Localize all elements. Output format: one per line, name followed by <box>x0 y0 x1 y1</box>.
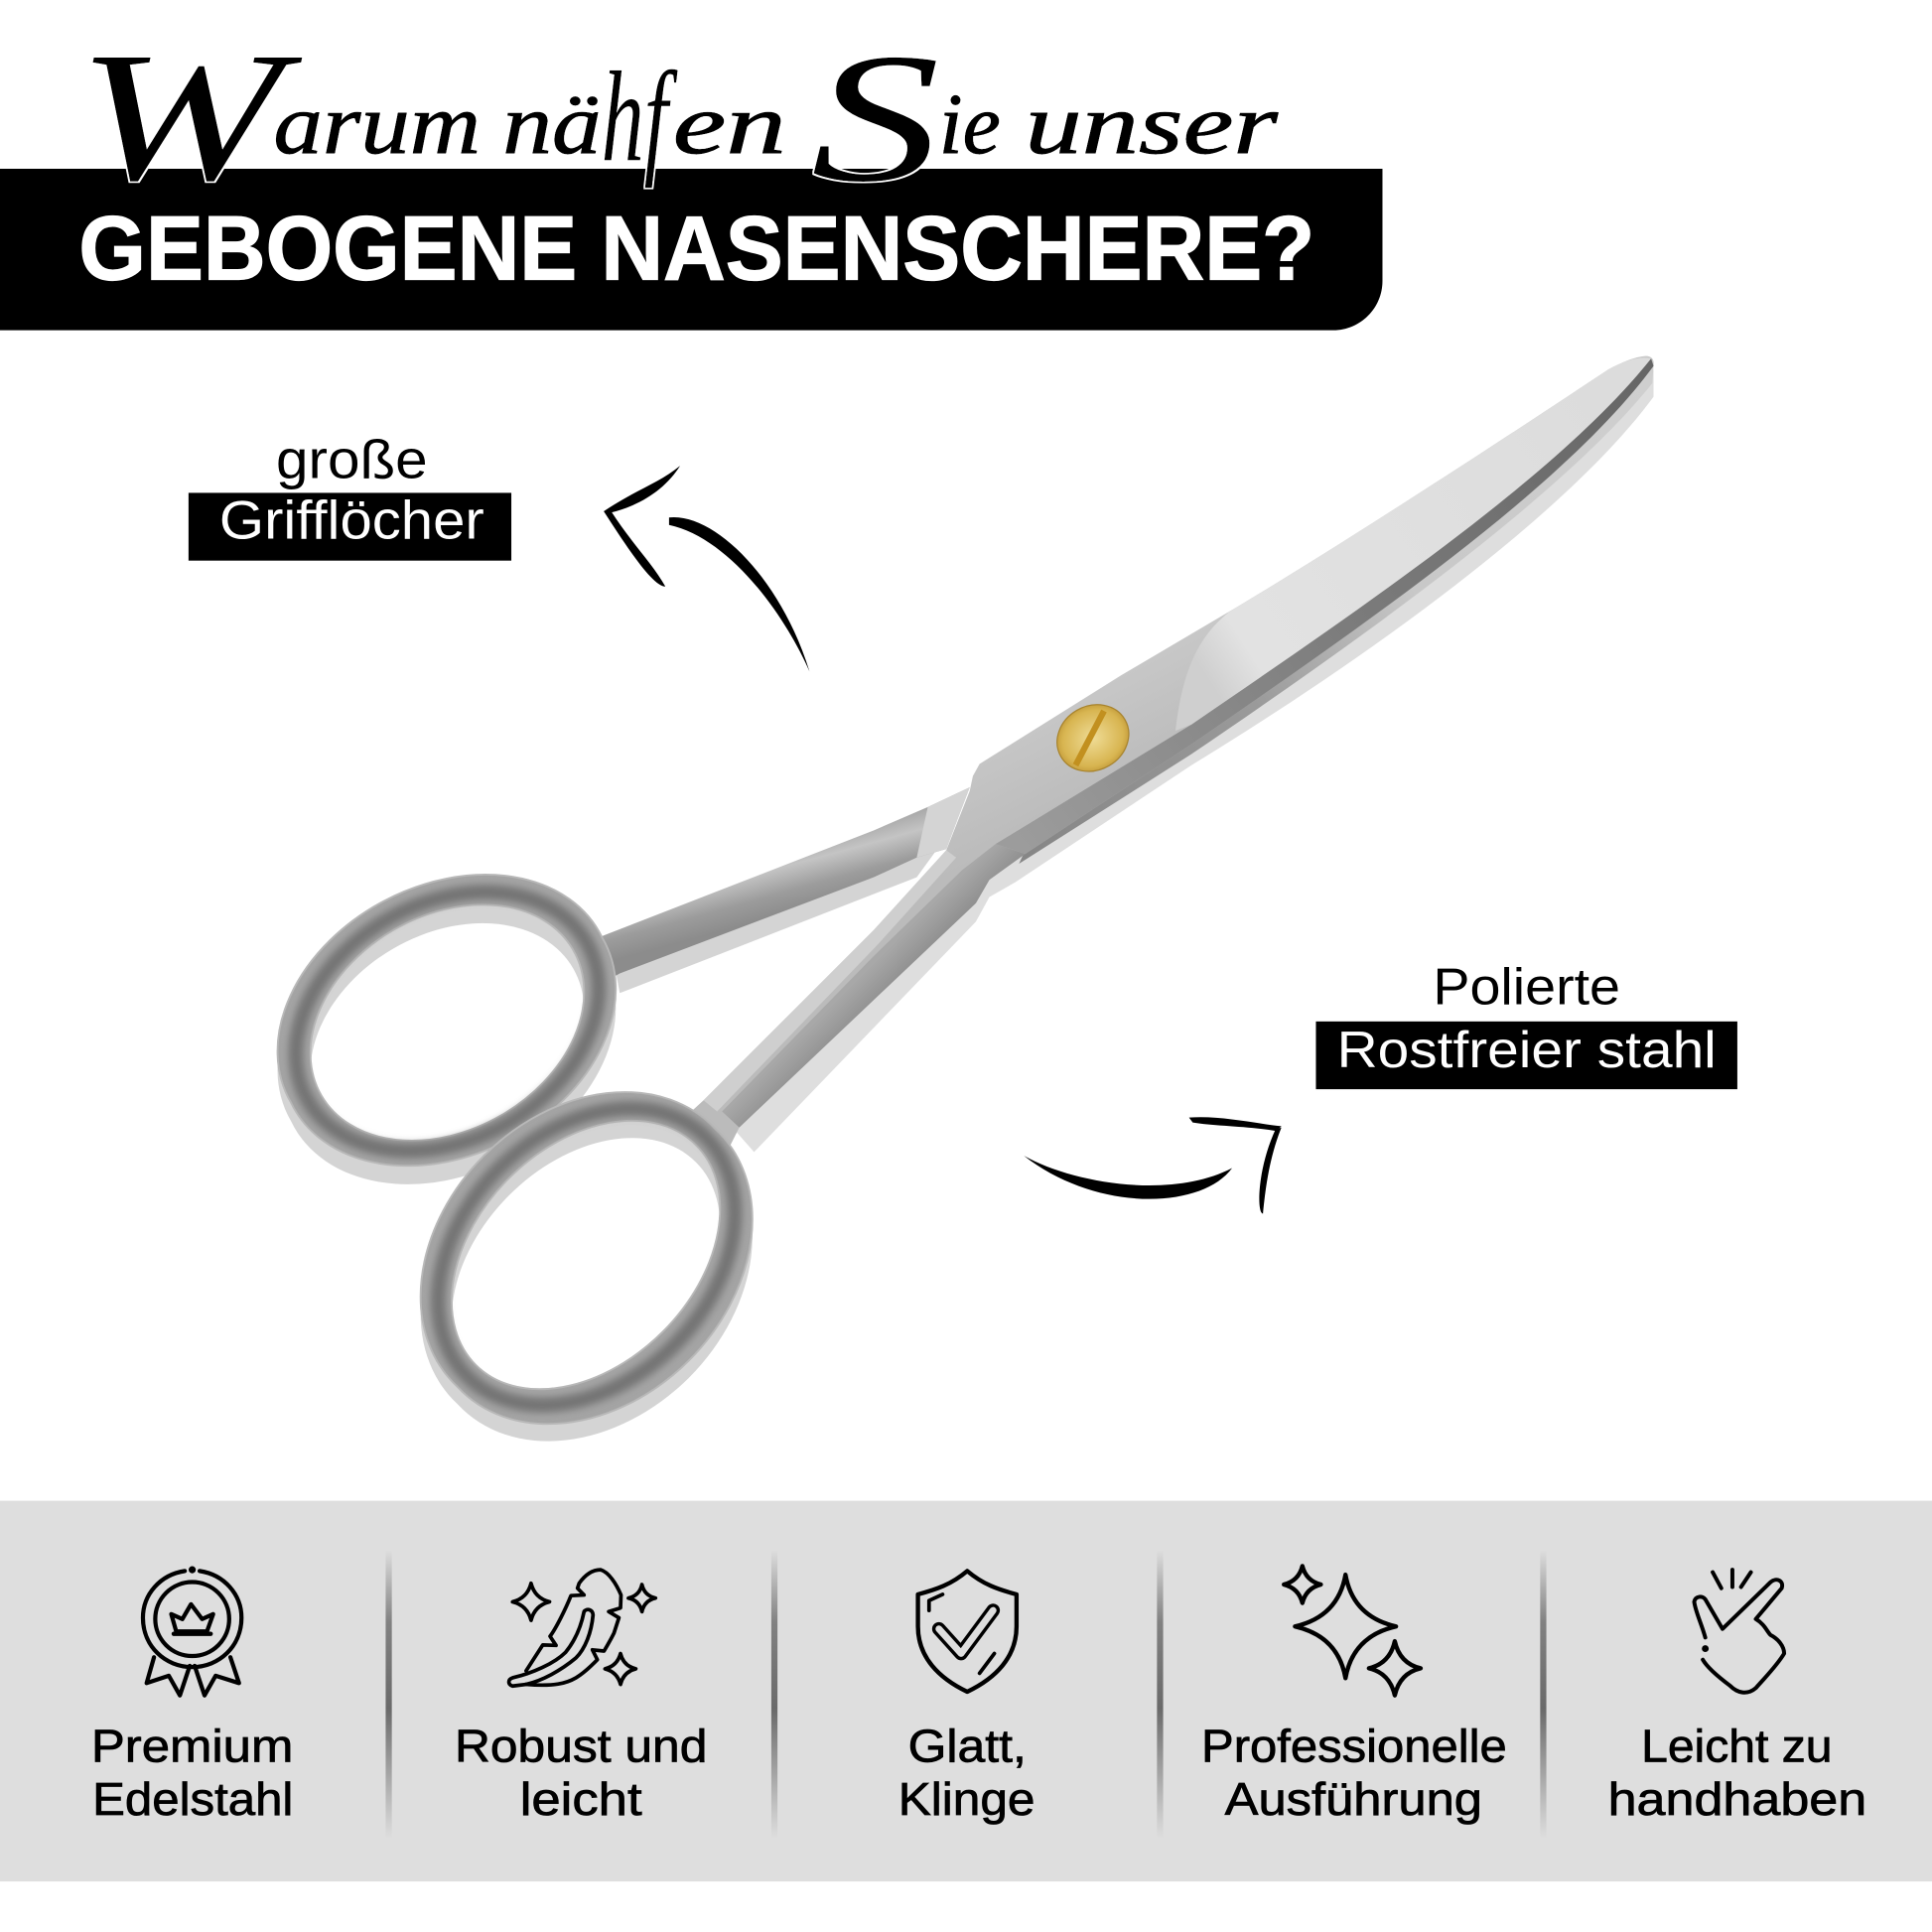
label: Glatt, <box>908 1721 1027 1772</box>
finger ring upper <box>250 840 644 1202</box>
callout line one: Polierte <box>1433 958 1620 1016</box>
callout: Polierte Rostfreier stahl <box>1315 958 1737 1089</box>
callout line two: Grifflöcher <box>219 489 484 550</box>
upper shank <box>589 787 970 986</box>
arrow: to blade <box>1024 1117 1282 1213</box>
callout line one: große <box>276 430 428 490</box>
finger ring lower <box>379 1049 794 1464</box>
label: Premium <box>91 1721 293 1772</box>
icon: snapping hand <box>1694 1570 1784 1693</box>
banner background <box>0 169 1382 331</box>
script heading: en <box>673 76 786 172</box>
label: Professionelle <box>1201 1721 1507 1772</box>
icon: sparkles <box>1284 1566 1421 1696</box>
arrow: to handle holes <box>604 466 809 671</box>
label: handhaben <box>1608 1773 1866 1825</box>
script heading: nä <box>502 76 602 172</box>
blade bevel <box>996 358 1654 854</box>
script heading: unser <box>1026 76 1280 172</box>
callout box <box>1315 1022 1737 1089</box>
shank wedge <box>916 787 970 858</box>
icon: feather <box>509 1570 655 1686</box>
label: Edelstahl <box>92 1773 293 1825</box>
feature: Robust und leicht <box>455 1570 720 1825</box>
callout: grosse Grifflocher <box>189 430 511 561</box>
icon: medal <box>143 1569 241 1696</box>
lower blade strip <box>1019 366 1654 864</box>
blade and lower shank body <box>690 356 1654 1152</box>
feature: Leicht zu handhaben <box>1608 1570 1866 1825</box>
panel: feature strip <box>0 1501 1932 1881</box>
script heading: hf <box>602 46 678 189</box>
scissors illustration <box>250 356 1654 1464</box>
label: leicht <box>520 1773 642 1825</box>
feature: Professionelle Ausfuhrung <box>1201 1566 1520 1825</box>
shank light strip <box>704 850 956 1111</box>
script heading: arum <box>274 76 481 172</box>
scissors shadow <box>278 369 1654 1442</box>
label: Robust und <box>455 1721 707 1772</box>
label: Leicht zu <box>1641 1721 1832 1772</box>
heading banner <box>0 169 1382 331</box>
brass screw <box>1044 692 1141 784</box>
script heading: S <box>811 16 940 220</box>
script heading: W <box>76 15 304 219</box>
label: Klinge <box>898 1773 1035 1825</box>
blade hollow grind <box>1175 357 1651 731</box>
banner title: GEBOGENE NASENSCHERE? <box>78 199 1314 300</box>
dividers <box>385 1550 1547 1839</box>
feature: Premium Edelstahl <box>91 1569 306 1825</box>
icon: shield <box>918 1571 1017 1692</box>
feature: Glatt, Klinge <box>898 1571 1039 1825</box>
strip background <box>0 1501 1932 1881</box>
callout line two: Rostfreier stahl <box>1337 1022 1717 1079</box>
callout box <box>189 492 511 561</box>
shank dark facet <box>722 844 1026 1128</box>
label: Ausführung <box>1225 1773 1482 1825</box>
script heading: ie <box>939 76 1001 172</box>
